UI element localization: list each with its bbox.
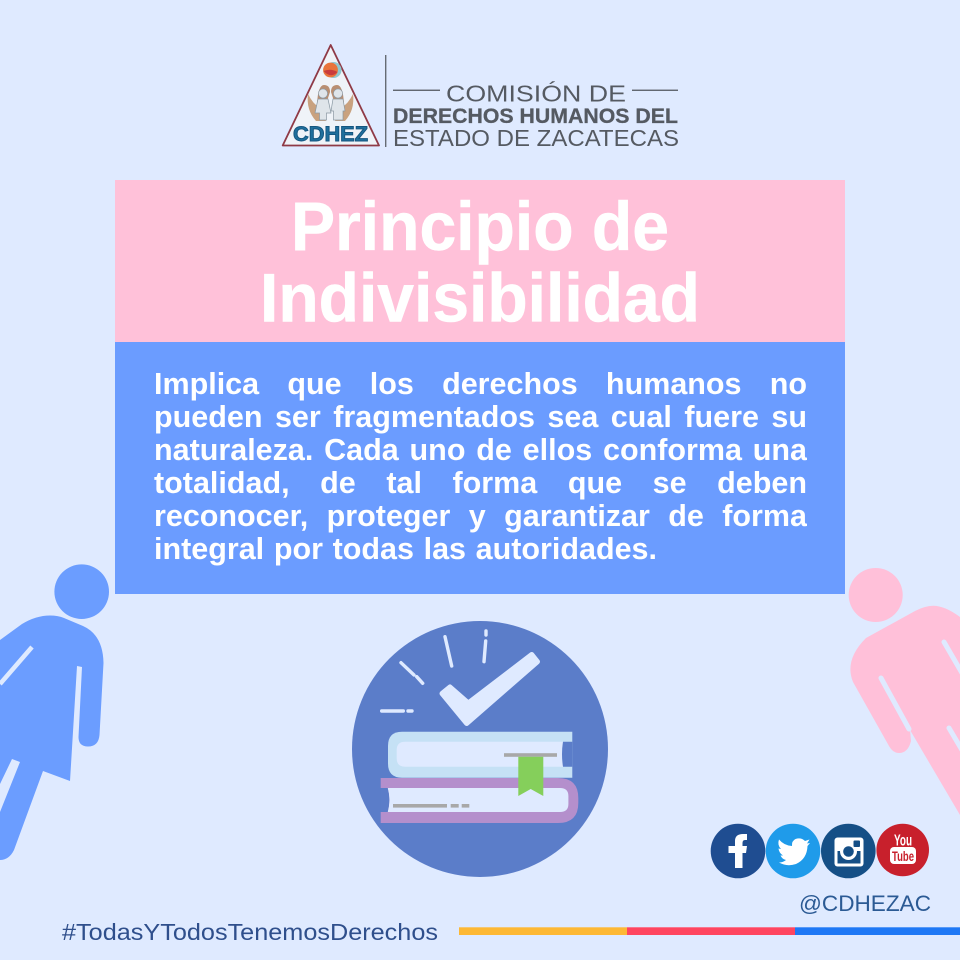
definition text: integral por todas las autoridades. xyxy=(154,533,657,566)
title: Principio de xyxy=(291,188,669,265)
figure: pink man xyxy=(849,568,960,815)
bottom book xyxy=(381,778,578,823)
definition text: reconocer, proteger y garantizar de forma xyxy=(154,500,807,533)
top book xyxy=(388,732,572,778)
icon: youtube: You xyxy=(894,832,912,850)
check mark xyxy=(442,654,538,724)
logo divider xyxy=(385,55,386,147)
definition text: totalidad, de tal forma que se deben xyxy=(154,467,807,500)
logo sun xyxy=(323,62,342,78)
social handle: @CDHEZAC xyxy=(799,891,931,916)
figure: blue woman xyxy=(0,564,109,860)
bookmark xyxy=(518,757,543,796)
tricolor bar xyxy=(459,927,960,935)
icon: youtube xyxy=(876,824,929,876)
definition text xyxy=(154,368,807,566)
panel: definition xyxy=(115,342,845,594)
icon: books and check mark xyxy=(352,621,608,877)
logo: CDHEZ xyxy=(283,45,379,146)
organization name xyxy=(393,80,679,151)
logo triangle xyxy=(283,45,379,146)
icon: youtube: Tube xyxy=(892,848,914,864)
definition text: Implica que los derechos humanos no xyxy=(154,368,807,401)
title: Indivisibilidad xyxy=(260,260,700,337)
definition text: naturaleza. Cada uno de ellos conforma una xyxy=(154,434,807,467)
hashtag: #TodasYTodosTenemosDerechos xyxy=(62,919,438,945)
panel: title xyxy=(115,180,845,342)
organization name: COMISIÓN DE xyxy=(446,80,626,106)
title xyxy=(260,188,700,337)
icon: twitter xyxy=(766,824,820,878)
icon: instagram xyxy=(821,824,876,878)
organization name: ESTADO DE ZACATECAS xyxy=(393,125,679,151)
organization name: DERECHOS HUMANOS DEL xyxy=(393,104,678,128)
definition text: pueden ser fragmentados sea cual fuere su xyxy=(154,401,807,434)
rays xyxy=(382,631,486,711)
logo acronym: CDHEZ xyxy=(293,123,368,146)
icon: facebook xyxy=(711,824,765,878)
logo hands and people xyxy=(308,85,353,121)
